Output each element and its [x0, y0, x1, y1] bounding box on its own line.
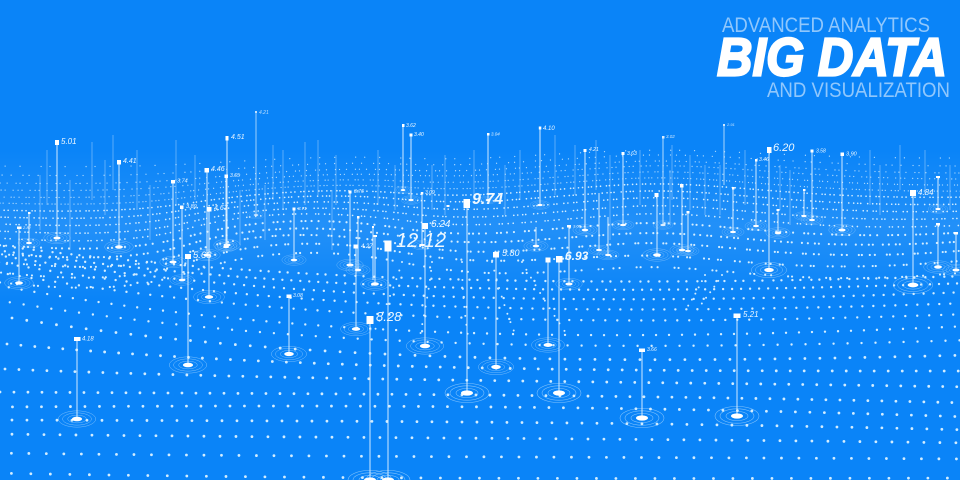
pin 6.24	[406, 219, 451, 354]
pin 9.74: 9.74	[472, 191, 503, 208]
pin 3.89: 3.89	[186, 204, 197, 210]
pin 2.91	[723, 122, 735, 185]
pin 3.08: 3.08	[293, 293, 303, 299]
small pin group left	[18, 212, 40, 248]
heading: advanced analytics: ADVANCED ANALYTICS	[722, 14, 930, 37]
pin 12.12: 12.12	[396, 230, 446, 252]
pin 9.74	[445, 191, 503, 403]
pin 5.63: 5.63	[193, 250, 212, 261]
pin 4.21 right: 4.21	[589, 147, 599, 153]
pin 3.06: 3.06	[573, 224, 582, 228]
small pin group centre	[346, 193, 619, 290]
pin 6.93	[537, 249, 589, 403]
small pin group right	[643, 176, 960, 276]
pin 3.40: 3.40	[414, 132, 424, 138]
pin 3.09: 3.09	[425, 190, 435, 196]
pin 3.46	[745, 157, 769, 231]
pin 3.06	[556, 224, 582, 290]
dot grid: converging radial columns	[372, 262, 722, 336]
pin 2.82	[5, 225, 33, 289]
faint background pins	[40, 135, 950, 250]
pin 3.02	[653, 134, 675, 229]
pin 2.82: 2.82	[22, 225, 32, 230]
pin 12.12	[366, 230, 446, 480]
pin 3.02: 3.02	[666, 134, 675, 139]
pin 4.18	[58, 336, 96, 427]
dot grid: foreground rows	[0, 318, 960, 478]
pin 5.80	[478, 248, 520, 375]
pin 8.28: 8.28	[376, 309, 402, 324]
pin 4.51: 4.51	[231, 134, 245, 141]
pin 3.04: 3.04	[491, 132, 500, 136]
pin 4.21 left: 4.21	[259, 110, 269, 116]
terrain glow band	[0, 150, 960, 300]
pin 3.04	[479, 132, 500, 204]
pin 3.66	[620, 347, 664, 428]
pin 4.84: 4.84	[918, 188, 934, 197]
pin unlabeled centre	[532, 258, 564, 352]
pin 3.71: 3.71	[298, 206, 307, 211]
pin 5.01	[44, 137, 77, 244]
pin 4.41	[105, 158, 137, 253]
pin 3.74	[160, 178, 188, 268]
dot grid: midground rows	[0, 245, 960, 346]
pin 4.51	[214, 134, 245, 251]
pin 3.89	[170, 204, 197, 285]
pin 8.28	[348, 309, 402, 480]
pin 3.08	[271, 293, 307, 362]
pin 3.76: 3.76	[354, 189, 364, 195]
pin 3.90	[829, 152, 858, 236]
pin 3.65: 3.65	[230, 173, 240, 179]
pin 3.58	[801, 148, 826, 225]
pin 3.09	[411, 190, 435, 250]
pin 4.41: 4.41	[123, 158, 137, 165]
pin 3.74: 3.74	[177, 178, 188, 184]
dot grid: faint far rows	[0, 150, 960, 204]
pin 3.63	[612, 151, 637, 230]
pin 3.65	[215, 173, 240, 252]
pin 2.91: 2.91	[726, 122, 735, 127]
pin 5.63	[169, 250, 212, 373]
pin 6.93: 6.93	[565, 249, 589, 263]
pin 5.80: 5.80	[502, 248, 520, 258]
pin 3.46: 3.46	[759, 157, 769, 163]
pin 4.27: 4.27	[361, 244, 373, 250]
pin 4.46	[194, 166, 225, 261]
pin 4.84	[893, 188, 934, 294]
pin 5.21: 5.21	[743, 310, 759, 319]
pin 3.62: 3.62	[406, 123, 416, 129]
title block	[717, 14, 950, 102]
pin 4.27	[341, 244, 373, 336]
pin 3.66: 3.66	[647, 347, 657, 353]
pin 5.01: 5.01	[61, 137, 77, 146]
pin 6.24: 6.24	[431, 219, 451, 230]
pin 3.58: 3.58	[816, 148, 826, 154]
pin 4.46: 4.46	[211, 166, 225, 173]
pin 3.62	[394, 123, 416, 194]
pin 3.63: 3.63	[627, 151, 637, 157]
dot grid: noisy terrain ridge rows	[0, 221, 960, 288]
pin 6.20: 6.20	[773, 142, 795, 154]
pin 4.18: 4.18	[82, 336, 94, 342]
dot grid: dense distant rows	[0, 184, 960, 241]
data pins	[5, 110, 960, 480]
pin 3.40	[401, 132, 424, 204]
pin 3.90: 3.90	[846, 152, 858, 158]
pin 4.10: 4.10	[543, 126, 555, 132]
pin 4.21 right	[573, 147, 599, 235]
pin 4.21 left	[247, 110, 269, 219]
pin 6.20	[751, 142, 795, 278]
pin 3.76	[337, 189, 364, 271]
pin 3.71	[282, 206, 307, 265]
pin 4.67: 4.67	[214, 205, 229, 212]
pin 4.10	[530, 126, 555, 209]
pin 5.21	[715, 310, 759, 426]
pin 4.67	[194, 205, 229, 304]
